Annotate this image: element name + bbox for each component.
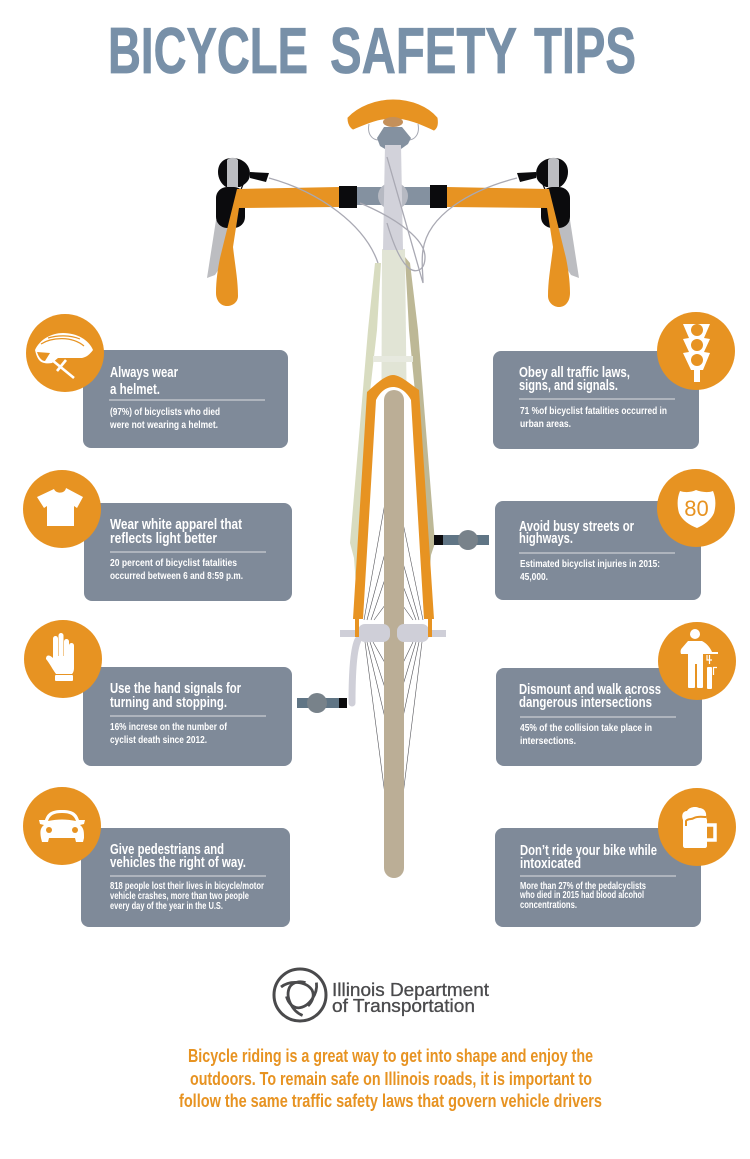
heading: highways. (519, 531, 573, 547)
statistic: intersections. (520, 736, 576, 747)
fork opening (363, 387, 424, 620)
statistic: who died in 2015 had blood alcohol (519, 890, 644, 901)
logo: Illinois Department of Transportation (274, 969, 489, 1021)
icon: person walking bicycle (658, 622, 736, 700)
heading (110, 365, 178, 398)
heading: Give pedestrians and (110, 842, 224, 858)
heading: Use the hand signals for (110, 681, 241, 697)
statistic: (97%) of bicyclists who died (110, 407, 220, 418)
footer text: follow the same traffic safety laws that govern vehicle drivers (179, 1091, 602, 1111)
statistic: Estimated bicyclist injuries in 2015: (520, 559, 660, 570)
statistic: cyclist death since 2012. (110, 735, 207, 746)
logo wordmark: of Transportation (332, 995, 475, 1016)
statistic: vehicle crashes, more than two people (110, 891, 249, 902)
brake cables (269, 157, 517, 283)
logo wordmark (332, 979, 489, 1016)
heading (519, 365, 630, 394)
handlebar and drops (216, 187, 570, 307)
statistic: occurred between 6 and 8:59 p.m. (110, 571, 243, 582)
heading: Obey all traffic laws, (519, 365, 630, 381)
left brake hood (207, 158, 269, 278)
panel: wear white apparel (23, 470, 292, 601)
statistic (519, 881, 646, 911)
footer text: Bicycle riding is a great way to get into shape and enjoy the (188, 1046, 593, 1066)
heading: Always wear (110, 365, 178, 381)
icon: highway shield: 80 (684, 496, 709, 521)
saddle loops (369, 124, 418, 140)
handlebar centre (357, 145, 430, 250)
icon: traffic light (657, 312, 735, 390)
title: SAFETY (330, 14, 517, 87)
stem collar (377, 127, 411, 149)
statistic (520, 406, 667, 430)
statistic: 16% increse on the number of (110, 722, 228, 733)
statistic (520, 723, 652, 747)
statistic: concentrations. (520, 900, 577, 911)
heading: reflects light better (110, 531, 217, 547)
panel: avoid busy streets (495, 469, 735, 600)
statistic: 818 people lost their lives in bicycle/motor (110, 881, 264, 892)
frame blades (350, 249, 435, 600)
heading: a helmet. (110, 382, 160, 398)
saddle (348, 100, 437, 130)
right reflector mount (434, 530, 489, 550)
statistic: 45% of the collision take place in (520, 723, 652, 734)
left reflector mount (297, 693, 347, 713)
heading (110, 517, 242, 547)
icon: t-shirt (23, 470, 101, 548)
right brake hood (517, 158, 579, 278)
icon: hand (24, 620, 102, 698)
panel: do not ride intoxicated (495, 788, 736, 927)
statistic: 71 %of bicyclist fatalities occurred in (520, 406, 667, 417)
icon: helmet (26, 314, 104, 392)
statistic: 45,000. (520, 572, 548, 583)
footer text (179, 1046, 602, 1111)
heading (110, 681, 241, 711)
wheel spokes (364, 503, 423, 795)
statistic: 20 percent of bicyclist fatalities (110, 558, 237, 569)
heading: signs, and signals. (519, 378, 618, 394)
statistic: were not wearing a helmet. (109, 420, 218, 431)
panel: obey traffic laws (493, 312, 735, 449)
heading: intoxicated (520, 856, 581, 872)
statistic: urban areas. (520, 419, 571, 430)
saddle bolt (383, 117, 403, 127)
heading: turning and stopping. (110, 695, 227, 711)
fork dropouts (355, 619, 432, 637)
panel: dismount and walk (496, 622, 736, 766)
title: TIPS (534, 14, 636, 87)
heading: Wear white apparel that (110, 517, 242, 533)
heading: Don’t ride your bike while (520, 843, 657, 859)
statistic (110, 881, 264, 912)
logo emblem (274, 969, 326, 1021)
panel: always wear a helmet (26, 314, 288, 448)
handlebar clamps (339, 185, 447, 208)
heading (519, 682, 661, 711)
heading: Avoid busy streets or (519, 519, 634, 535)
heading: dangerous intersections (519, 695, 652, 711)
heading (520, 843, 657, 872)
statistic (110, 558, 243, 582)
heading: vehicles the right of way. (110, 855, 246, 871)
icon: beer mug (658, 788, 736, 866)
statistic (520, 559, 660, 583)
statistic (109, 407, 220, 431)
logo wordmark: Illinois Department (332, 979, 489, 1000)
icon: car (23, 787, 101, 865)
statistic (110, 722, 228, 746)
panel: use hand signals (24, 620, 292, 766)
statistic: More than 27% of the pedalcyclists (520, 881, 646, 892)
heading: Dismount and walk across (519, 682, 661, 698)
brake calipers (340, 624, 446, 703)
title: BICYCLE (108, 14, 308, 87)
icon: highway shield (657, 469, 735, 547)
front fork (353, 375, 434, 619)
heading (110, 842, 246, 871)
statistic: every day of the year in the U.S. (110, 901, 223, 912)
title (108, 14, 636, 87)
footer text: outdoors. To remain safe on Illinois roads, it is important to (190, 1069, 592, 1089)
illustration: bicycle front view (207, 100, 579, 878)
panel: give right of way (23, 787, 290, 927)
heading (519, 519, 634, 547)
front wheel (384, 390, 404, 878)
